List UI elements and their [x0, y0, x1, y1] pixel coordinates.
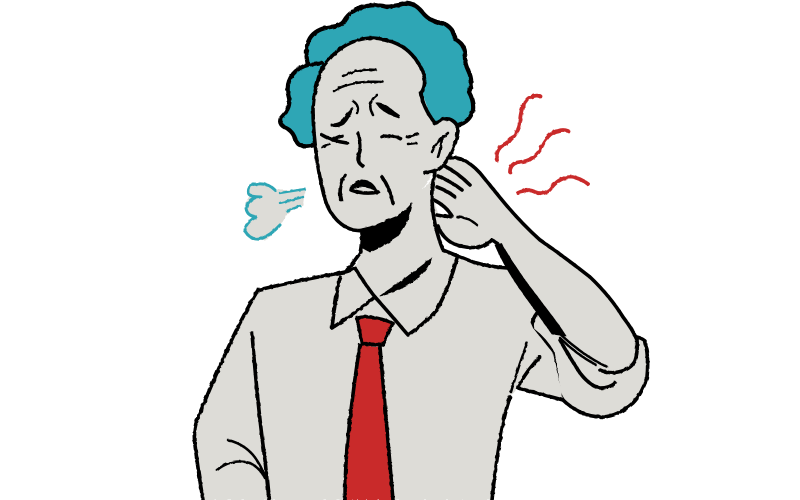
- eyes closed: [322, 135, 347, 143]
- pain squiggles: [497, 96, 588, 193]
- fingers: [434, 165, 477, 225]
- squiggle 2: [510, 130, 568, 172]
- face: [313, 38, 458, 252]
- squiggle 3: [518, 177, 588, 193]
- right arm and hand: [437, 158, 648, 417]
- nose: [358, 133, 363, 166]
- neck edge line: [347, 173, 443, 270]
- frown lines: [353, 101, 358, 113]
- hairline: [322, 38, 435, 123]
- sleeve cuff: [532, 313, 648, 417]
- arm crease: [495, 243, 566, 336]
- inner arm seam: [252, 333, 269, 500]
- ear: [428, 118, 458, 172]
- shirt collar: [332, 258, 457, 335]
- forehead wrinkles: [343, 70, 376, 76]
- cheek lines: [340, 175, 345, 200]
- neck shadow: [353, 203, 412, 252]
- neck: [345, 175, 440, 298]
- mouth: [350, 180, 378, 192]
- tie: [345, 317, 393, 500]
- breath puff: [245, 183, 305, 240]
- eyebrows: [331, 108, 353, 127]
- elbow folds: [228, 440, 265, 478]
- hair: [280, 3, 473, 146]
- jaw and cheek outline: [313, 68, 362, 231]
- torso with shirt: [194, 240, 607, 500]
- squiggle 1: [497, 96, 540, 160]
